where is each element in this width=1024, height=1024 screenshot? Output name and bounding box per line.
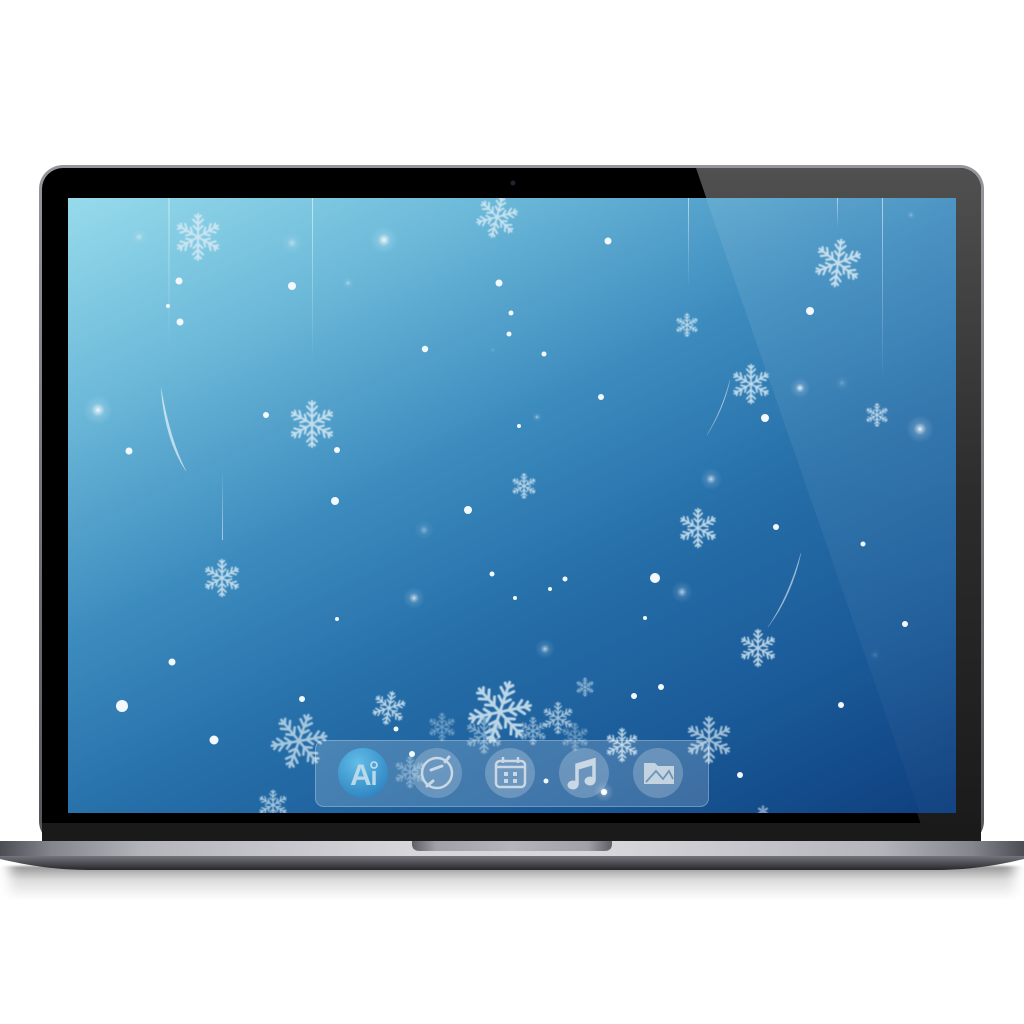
snowflakes — [176, 192, 888, 820]
icon: AI app: A — [350, 759, 372, 792]
laptop lid — [39, 165, 984, 845]
soft glows — [83, 210, 934, 662]
illustration: laptop with snowfall wallpaper — [0, 165, 1024, 895]
laptop base — [0, 841, 1024, 870]
sparkle and dot — [544, 778, 614, 802]
icon: photos folder — [633, 748, 683, 798]
icon: music note — [559, 748, 609, 798]
icon: AI app — [338, 748, 388, 798]
screen wallpaper — [68, 192, 956, 820]
webcam — [510, 180, 516, 186]
hinge notch — [412, 841, 612, 851]
snow dots — [116, 238, 908, 778]
base shadow — [10, 866, 1014, 900]
icon: compass — [412, 748, 462, 798]
screen glare — [706, 198, 956, 667]
dock — [316, 740, 708, 806]
light streaks — [161, 198, 883, 627]
icon: calendar — [485, 748, 535, 798]
